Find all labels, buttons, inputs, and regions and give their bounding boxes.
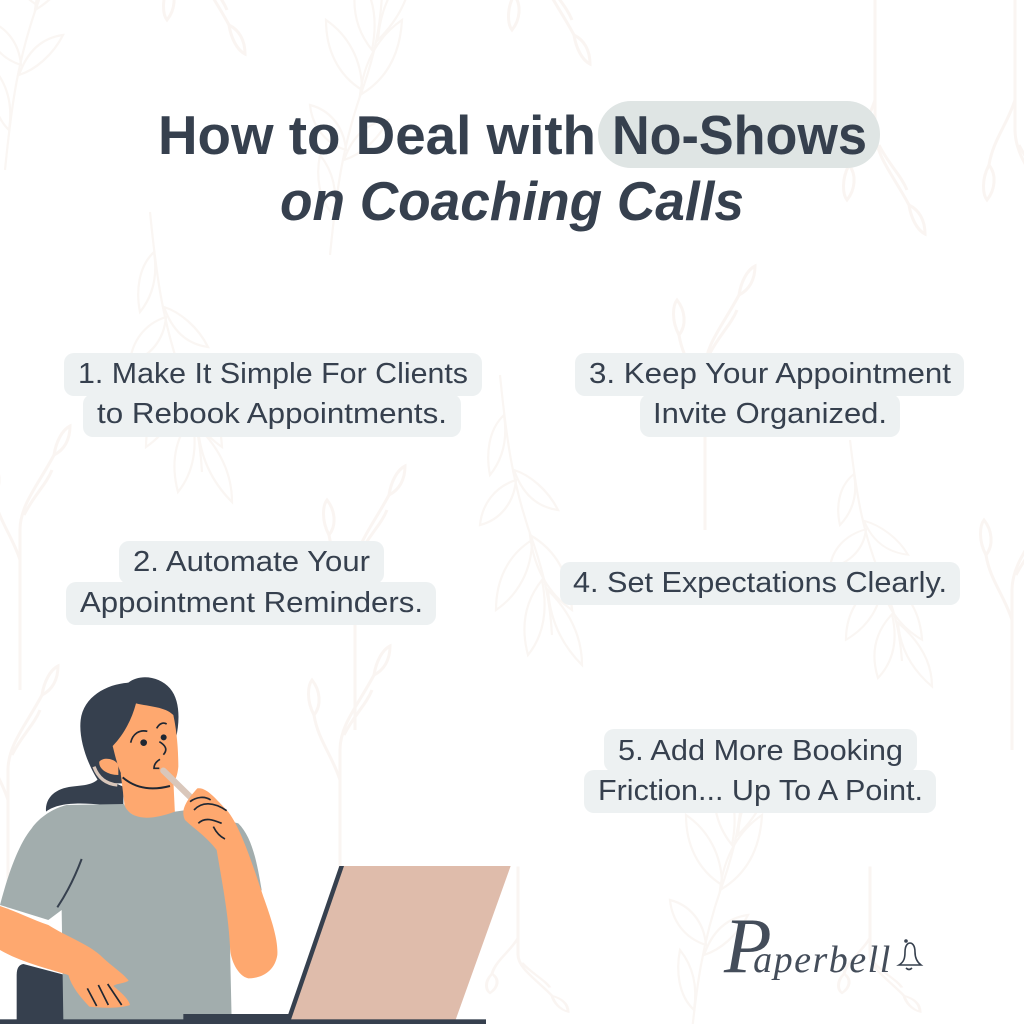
tip 2	[66, 541, 436, 625]
laptop edge	[286, 866, 344, 1021]
tip 4: 4. Set Expectations Clearly.	[573, 567, 947, 599]
lower arm and hand	[0, 906, 130, 1008]
title highlighted words: No-Shows	[612, 104, 867, 166]
tip 1: 1. Make It Simple For Clients	[78, 358, 468, 390]
hair	[80, 677, 178, 783]
tip 4	[560, 562, 960, 605]
neck	[121, 773, 175, 820]
ear	[99, 759, 118, 775]
brows, nose and mouth	[131, 723, 167, 768]
tip 5: 5. Add More Booking	[618, 735, 903, 767]
face	[113, 703, 178, 789]
laptop screen	[288, 866, 511, 1021]
tip 1: to Rebook Appointments.	[97, 398, 447, 430]
earring band	[94, 767, 117, 785]
pen	[163, 771, 191, 797]
laptop base	[183, 1014, 289, 1021]
tip 3: Invite Organized.	[653, 398, 887, 430]
knuckle lines	[87, 984, 122, 1006]
illustration: person thinking at laptop	[0, 677, 511, 1024]
title	[158, 101, 880, 232]
tip 2: 2. Automate Your	[133, 546, 370, 578]
title highlight	[598, 101, 880, 168]
tip 5	[584, 729, 936, 813]
desk	[0, 1019, 486, 1024]
tip 3: 3. Keep Your Appointment	[589, 358, 951, 390]
title line 1: How to Deal with	[158, 104, 596, 166]
ponytail	[46, 777, 123, 812]
tip 3	[575, 353, 964, 437]
eyes	[140, 734, 167, 746]
title line 2: on Coaching Calls	[280, 170, 744, 232]
tip 1	[64, 353, 482, 437]
shirt	[0, 804, 262, 1021]
jaw line	[123, 777, 170, 788]
tip 5: Friction... Up To A Point.	[598, 775, 923, 807]
sleeve line	[57, 859, 82, 907]
tip 2: Appointment Reminders.	[80, 587, 423, 619]
wordmark: Paperbell	[723, 902, 892, 989]
raised arm and hand	[183, 788, 277, 978]
logo	[723, 902, 921, 989]
icon: bell	[899, 940, 921, 970]
chair	[17, 964, 65, 1021]
finger lines	[190, 797, 227, 839]
